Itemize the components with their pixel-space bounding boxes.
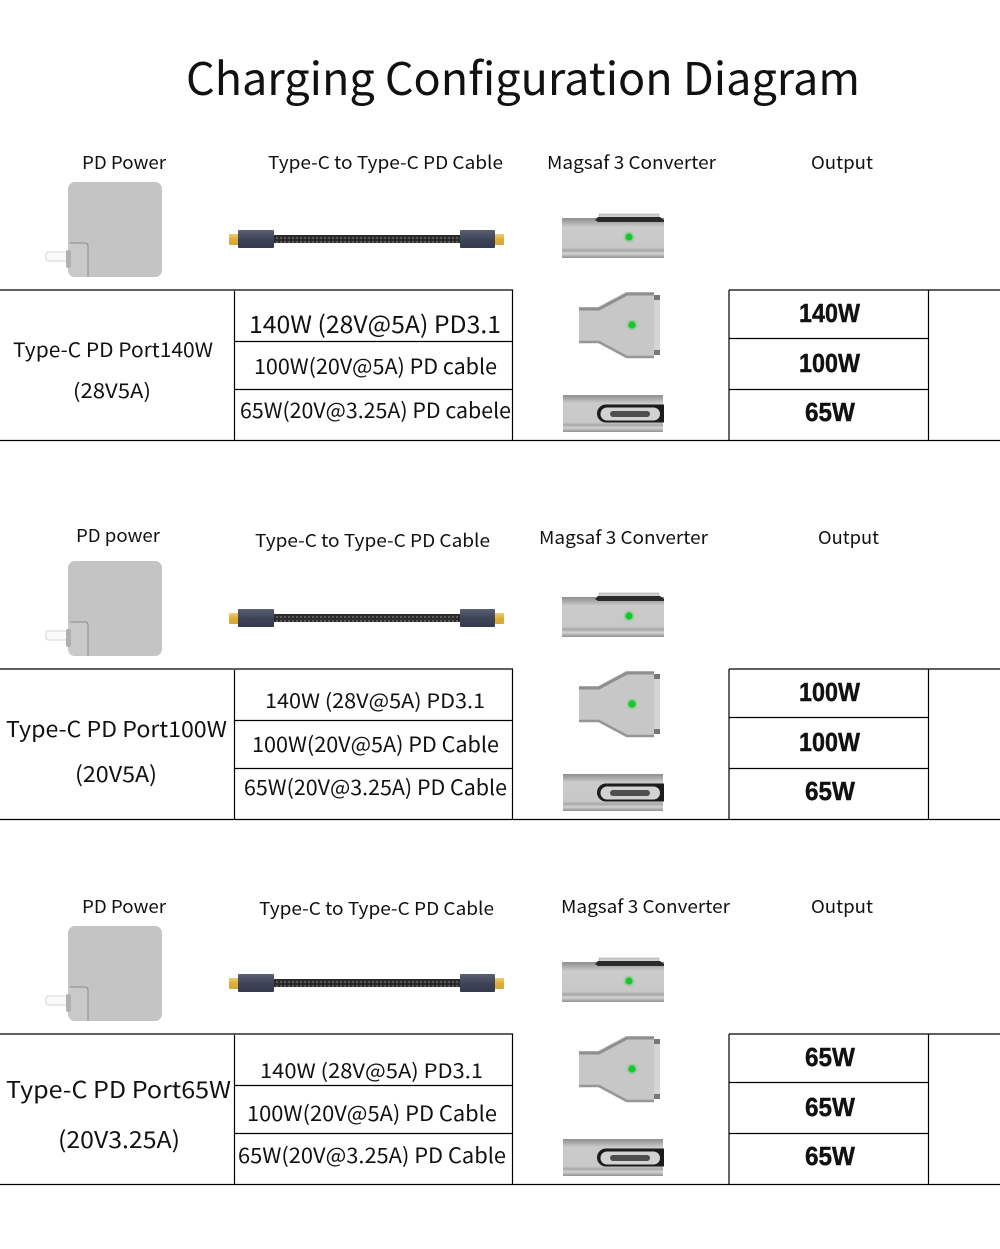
icon: converter side view — [562, 593, 664, 637]
icon: converter port view — [563, 1139, 664, 1176]
icon: power adapter — [46, 561, 162, 656]
table: power and cable options — [0, 290, 1000, 440]
text: 100W cable: 100W(20V@5A) PD cable — [254, 351, 497, 381]
output: 100W: 100W — [799, 348, 860, 378]
icon: converter port view — [563, 395, 664, 432]
heading: converter: Magsaf 3 Converter — [539, 524, 709, 550]
text: 65W cable: 65W(20V@3.25A) PD Cable — [238, 1140, 506, 1170]
heading: cable: Type-C to Type-C PD Cable — [268, 149, 503, 175]
heading: output: Output — [811, 893, 873, 919]
text: 140W cable: 140W (28V@5A) PD3.1 — [265, 685, 485, 714]
heading: PD Power: PD Power — [82, 149, 167, 175]
text: 100W cable: 100W(20V@5A) PD Cable — [247, 1098, 497, 1128]
panel: 65W charger configuration — [0, 893, 1000, 1184]
output: 100W: 100W — [799, 727, 860, 757]
heading: converter: Magsaf 3 Converter — [547, 149, 717, 175]
heading: converter: Magsaf 3 Converter — [561, 893, 731, 919]
heading: output: Output — [818, 524, 879, 550]
heading: output: Output — [811, 149, 873, 175]
icon: converter side view — [562, 958, 664, 1002]
output: 65W: 65W — [805, 1042, 855, 1072]
icon: converter side view — [562, 214, 664, 258]
icon: converter top view — [579, 671, 660, 737]
output: 65W: 65W — [805, 1092, 855, 1122]
panel: 100W charger configuration — [0, 522, 1000, 820]
icon: Type-C cable — [229, 230, 504, 248]
heading: PD power: PD power — [76, 522, 161, 548]
text: input voltage: (20V3.25A) — [58, 1121, 180, 1155]
output: 140W: 140W — [799, 298, 860, 328]
text: input port: Type-C PD Port100W — [6, 712, 227, 744]
output: 65W: 65W — [805, 397, 855, 427]
table: power and cable options — [0, 1034, 1000, 1184]
heading: cable: Type-C to Type-C PD Cable — [255, 527, 490, 553]
title: Charging Configuration Diagram — [186, 43, 860, 108]
text: 140W cable: 140W (28V@5A) PD3.1 — [249, 305, 501, 340]
output: 65W: 65W — [805, 776, 855, 806]
icon: Type-C cable — [229, 609, 504, 627]
text: input voltage: (20V5A) — [75, 757, 157, 789]
icon: Type-C cable — [229, 974, 504, 992]
icon: power adapter — [46, 926, 162, 1021]
text: 100W cable: 100W(20V@5A) PD Cable — [252, 729, 499, 759]
text: input voltage: (28V5A) — [73, 375, 151, 404]
text: 140W cable: 140W (28V@5A) PD3.1 — [260, 1055, 483, 1084]
text: 65W cable: 65W(20V@3.25A) PD Cable — [244, 772, 507, 802]
icon: power adapter — [46, 182, 162, 277]
icon: converter top view — [579, 1036, 660, 1102]
panel: 140W charger configuration — [0, 149, 1000, 440]
icon: converter top view — [579, 292, 660, 358]
icon: converter port view — [563, 774, 664, 811]
table: power and cable options — [0, 669, 1000, 820]
output: 100W: 100W — [799, 677, 860, 707]
text: input port: Type-C PD Port65W — [6, 1071, 231, 1105]
heading: cable: Type-C to Type-C PD Cable — [259, 895, 494, 921]
output: 65W: 65W — [805, 1141, 855, 1171]
text: input port: Type-C PD Port140W — [13, 334, 213, 363]
text: 65W cable: 65W(20V@3.25A) PD cabele — [240, 395, 511, 425]
heading: PD Power: PD Power — [82, 893, 167, 919]
